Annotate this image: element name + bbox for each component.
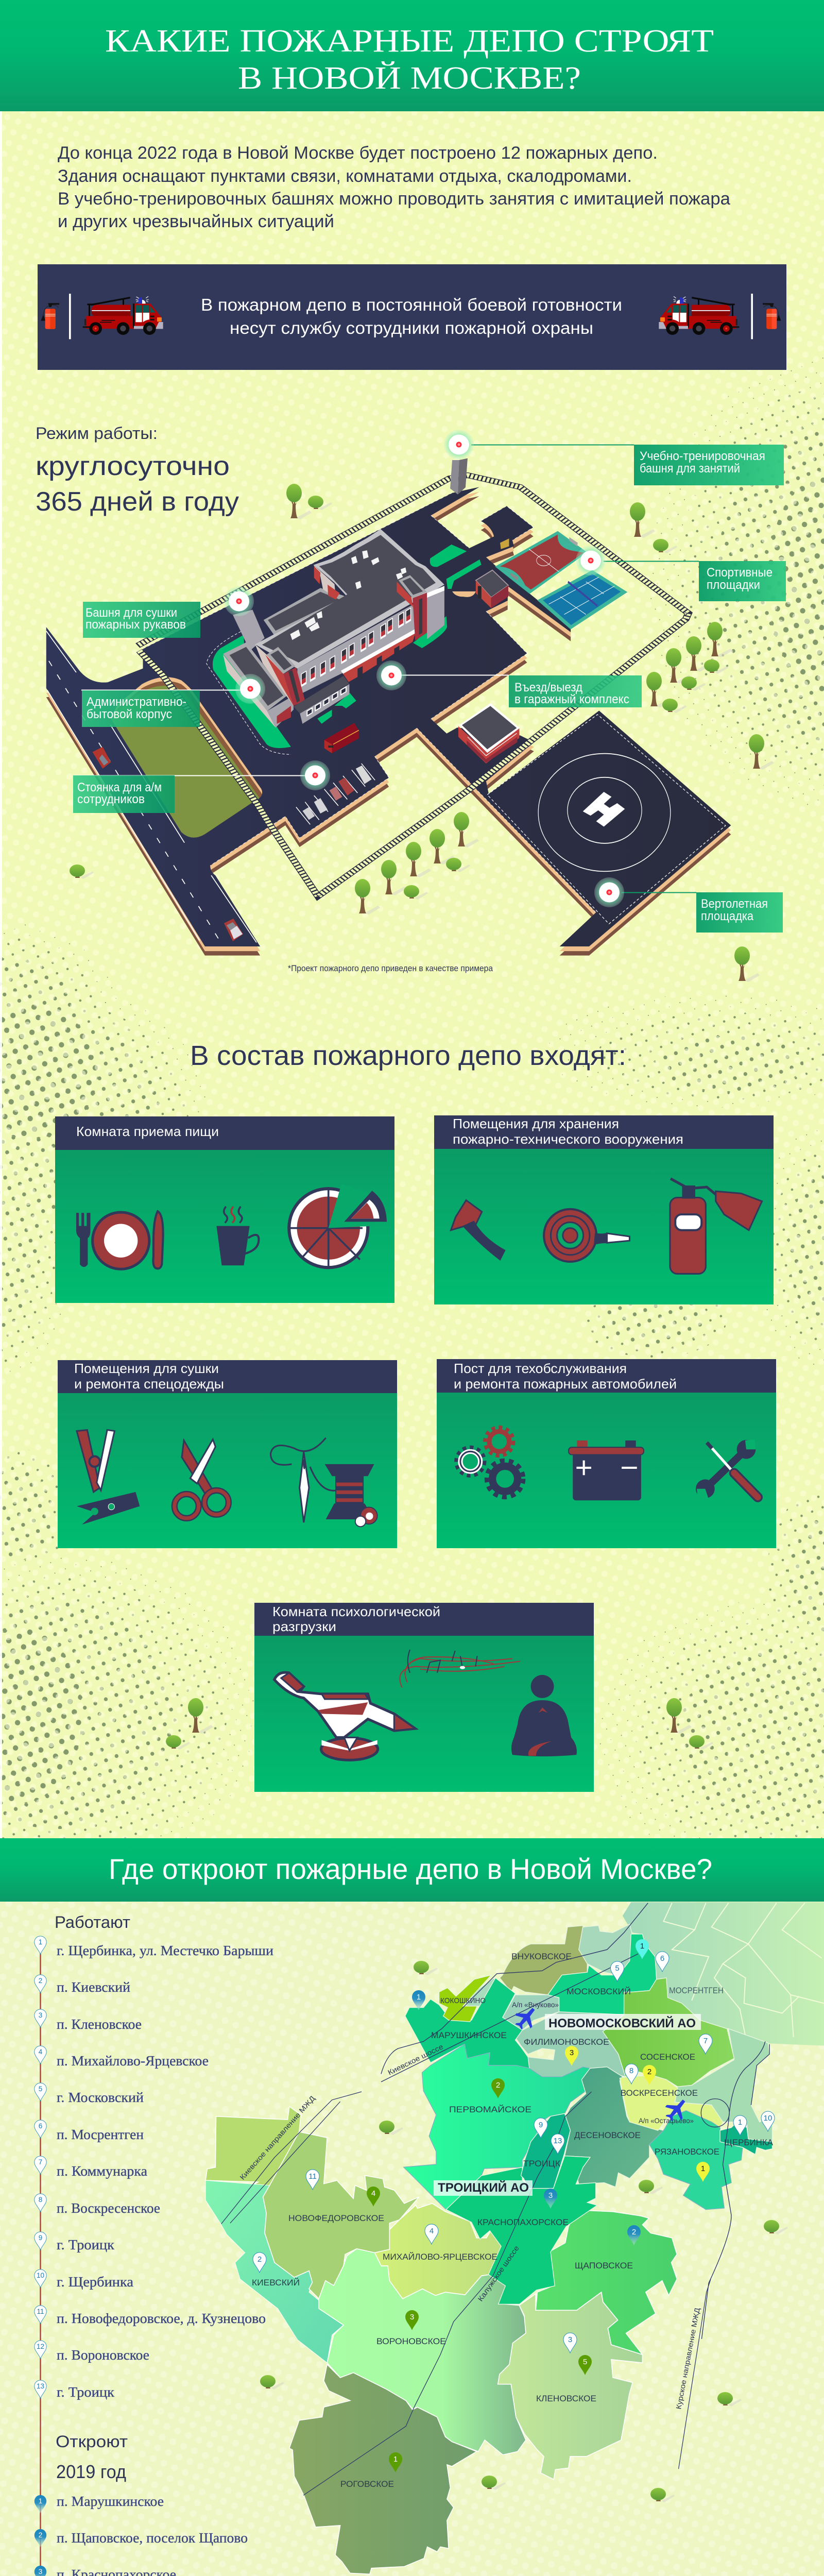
map pins: planned: 1 <box>640 1942 644 1951</box>
map pins: planned: 2 <box>647 2067 651 2076</box>
district names: СОСЕНСКОЕ <box>640 2052 695 2062</box>
callout: staff parking: сотрудников <box>77 792 145 806</box>
item 7: п. Коммунарка <box>57 2163 147 2179</box>
district names: ДЕСЕНОВСКОЕ <box>574 2130 641 2140</box>
panel: dining room: Комната приема пищи <box>76 1124 219 1139</box>
item 9 <box>35 2232 115 2252</box>
rear wing <box>264 588 347 635</box>
panel: equipment storage: пожарно-технического вооружения <box>453 1131 683 1147</box>
district names: КОКОШКИНО <box>440 1996 486 2005</box>
district names: МАРУШКИНСКОЕ <box>431 2030 507 2040</box>
helipad <box>487 715 726 924</box>
icon: right extinguisher, divider and truck <box>659 294 781 339</box>
schedule text <box>36 424 239 517</box>
callout: admin building: Административно- <box>87 695 186 709</box>
rooftop units <box>290 550 406 640</box>
panel: equipment storage <box>434 1115 774 1304</box>
map pins: operating: 8 <box>629 2066 633 2075</box>
map section background <box>0 1902 824 2576</box>
panel: psychological relief room: разгрузки <box>272 1619 336 1634</box>
item Щаповское: 2 <box>39 2531 42 2539</box>
fire truck <box>324 723 359 753</box>
map regions south and west <box>205 2107 677 2574</box>
item 8 <box>35 2194 160 2216</box>
item 11: п. Новофедоровское, д. Кузнецово <box>57 2311 266 2326</box>
item 4: 4 <box>39 2048 43 2056</box>
road labels <box>238 2042 701 2410</box>
callout: hose drying tower <box>83 586 254 638</box>
district names: МОСКОВСКИЙ <box>566 1987 631 1996</box>
trees around site <box>70 484 774 982</box>
callout: admin building: бытовой корпус <box>87 707 172 721</box>
road labels: Калужское шоссе <box>476 2244 521 2303</box>
district names: ЩЕРБИНКА <box>724 2138 774 2147</box>
map pins: operating: 7 <box>703 2037 708 2045</box>
okrug labels: ТРОИЦКИЙ АО <box>438 2180 529 2195</box>
old Moscow districts <box>623 1902 824 2046</box>
header band: map title: Где откроют пожарные депо в Новой Москве? <box>109 1853 712 1885</box>
district names: ВОСКРЕСЕНСКОЕ <box>621 2088 698 2098</box>
callout: helipad <box>594 877 783 933</box>
title line 2: В НОВОЙ МОСКВЕ? <box>238 61 581 96</box>
isometric site plan <box>46 430 786 982</box>
map of New Moscow <box>205 1902 824 2574</box>
district names: ТРОИЦК <box>523 2159 560 2168</box>
lawn <box>110 677 262 838</box>
banner: combat readiness <box>38 264 786 370</box>
item Марушкинское <box>35 2494 164 2513</box>
header band: map title <box>0 1838 824 1902</box>
item 2 <box>35 1975 130 1995</box>
panel: vehicle maintenance <box>437 1359 776 1548</box>
panel: vehicle maintenance: Пост для техобслуживания <box>454 1361 627 1376</box>
item 9: г. Троицк <box>57 2237 115 2252</box>
front wall <box>297 603 415 696</box>
map pins: planned: 1 <box>393 2455 398 2464</box>
district names: НОВОФЕДОРОВСКОЕ <box>288 2213 384 2223</box>
panel: uniform drying and repair <box>58 1360 397 1548</box>
icons: massage chair, music, meditating person <box>274 1650 577 1760</box>
map pins: operating: 6 <box>660 1954 664 1963</box>
callout: training tower: башня для занятий <box>640 462 740 476</box>
item 1: г. Щербинка, ул. Местечко Барыши <box>57 1943 273 1958</box>
panel: equipment storage: Помещения для хранения <box>453 1116 619 1131</box>
plan footnote: *Проект пожарного депо приведен в качестве примера <box>288 963 493 973</box>
schedule text: 365 дней в году <box>36 487 239 517</box>
callout: garage entrance: в гаражный комплекс <box>514 692 629 706</box>
parked cars <box>296 764 375 824</box>
district names <box>252 1952 774 2489</box>
map pins: operating: 9 <box>539 2121 543 2129</box>
section heading: rooms: В состав пожарного депо входят: <box>190 1040 626 1071</box>
fence <box>138 475 689 896</box>
item 10: 10 <box>37 2272 44 2279</box>
district names: КЛЕНОВСКОЕ <box>536 2394 596 2403</box>
main building block <box>92 529 444 824</box>
item 8: 8 <box>39 2196 42 2204</box>
bushes on map <box>260 1961 788 2502</box>
district names: ФИЛИМОНОВСКОЕ <box>524 2037 609 2047</box>
red shed <box>476 570 508 608</box>
airports: А/п «Внуково» <box>512 2001 559 2009</box>
doors band <box>341 629 415 674</box>
header band: main title <box>0 0 824 111</box>
map pins: planned <box>367 1939 710 2472</box>
icons: gears, battery, tools <box>456 1427 758 1500</box>
okrug labels: НОВОМОСКОВСКИЙ АО <box>548 2016 696 2030</box>
item 6 <box>35 2120 144 2142</box>
callout: sports grounds: Спортивные <box>707 566 772 580</box>
list heading: to open: Откроют <box>56 2432 128 2451</box>
item 7 <box>35 2156 147 2179</box>
site asphalt base with extruded edge <box>46 475 731 956</box>
map pins: planned: 2 <box>632 2228 636 2236</box>
airports <box>510 2001 694 2125</box>
item 4 <box>35 2046 209 2069</box>
icons: plate, cup, pizza <box>76 1184 387 1269</box>
district names: РОГОВСКОЕ <box>340 2479 394 2489</box>
district names: ПЕРВОМАЙСКОЕ <box>449 2105 531 2114</box>
callout: helipad: Вертолетная <box>701 897 768 911</box>
item 11: 11 <box>37 2308 44 2315</box>
banner text: несут службу сотрудники пожарной охраны <box>230 318 593 337</box>
callout: garage entrance <box>376 660 642 707</box>
panel: psychological relief room: Комната психологической <box>272 1604 440 1619</box>
item 1: 1 <box>39 1938 42 1946</box>
intro text block: Здания оснащают пунктами связи, комнатами отдыха, скалодромами. <box>58 166 632 186</box>
building east wall <box>427 586 444 639</box>
green strips <box>413 545 482 648</box>
okrug labels <box>434 2014 701 2196</box>
item 5: 5 <box>39 2085 42 2093</box>
district names: КРАСНОПАХОРСКОЕ <box>477 2217 569 2227</box>
callout: helipad: площадка <box>701 909 754 923</box>
panel: uniform drying and repair: и ремонта спецодежды <box>74 1376 224 1392</box>
icon: left extinguisher, divider and truck <box>41 294 163 339</box>
map pins: planned: 2 <box>496 2081 500 2090</box>
callout: sports grounds <box>576 546 786 601</box>
item 8: п. Воскресенское <box>57 2200 160 2216</box>
map pins: planned: 5 <box>583 2358 587 2366</box>
map pins: planned: 4 <box>371 2189 375 2198</box>
intro text block <box>58 143 730 231</box>
icons: axe, hose, extinguisher <box>451 1179 762 1274</box>
intro text block: и других чрезвычайных ситуаций <box>58 212 334 231</box>
item 4: п. Михайлово-Ярцевское <box>57 2053 209 2069</box>
map pins: operating: 10 <box>764 2114 772 2123</box>
road labels: Курское направление МЖД <box>674 2307 701 2410</box>
district names: ВНУКОВСКОЕ <box>511 1952 572 1961</box>
road labels: Киевское шоссе <box>386 2042 444 2077</box>
low annex <box>294 676 349 714</box>
district names: МИХАЙЛОВО-ЯРЦЕВСКОЕ <box>383 2252 497 2262</box>
item Краснопахорское: 3 <box>39 2568 42 2575</box>
callout: hose drying tower: Башня для сушки <box>85 606 177 620</box>
airports: А/п «Остафьево» <box>639 2116 694 2125</box>
map pins: planned: 3 <box>410 2313 414 2321</box>
item 9: 9 <box>39 2234 42 2242</box>
stair tower right <box>397 582 413 607</box>
item 12: 12 <box>37 2343 44 2350</box>
item 6: п. Мосрентген <box>57 2127 144 2142</box>
callout: staff parking <box>73 760 330 813</box>
item 2: 2 <box>39 1977 42 1985</box>
trees near relief room <box>166 1698 713 1750</box>
district names: МОСРЕНТГЕН <box>669 1986 724 1995</box>
map pins: planned: 1 <box>701 2164 705 2173</box>
admin wing <box>223 642 287 711</box>
map pins: planned: 3 <box>570 2048 574 2057</box>
road markings <box>46 631 256 942</box>
title line 1: КАКИЕ ПОЖАРНЫЕ ДЕПО СТРОЯТ <box>105 24 714 59</box>
item 3: 3 <box>39 2011 42 2019</box>
item 10 <box>35 2269 133 2290</box>
item 5: г. Московский <box>57 2090 144 2105</box>
map pins: operating: 11 <box>308 2172 317 2181</box>
list: operating depots <box>35 1936 273 2400</box>
district names: ЩАПОВСКОЕ <box>575 2261 633 2270</box>
item 13: г. Троицк <box>57 2384 115 2400</box>
item 7: 7 <box>39 2158 42 2166</box>
item 2: п. Киевский <box>57 1979 130 1995</box>
item 6: 6 <box>39 2122 42 2130</box>
callout: admin building <box>81 674 265 727</box>
item 5 <box>35 2083 144 2105</box>
callout: training tower <box>444 430 784 485</box>
windows <box>301 607 411 687</box>
main roof <box>255 529 444 669</box>
garage building <box>458 703 520 764</box>
map pins: operating: 4 <box>430 2227 434 2235</box>
green lawn around building <box>213 635 291 748</box>
map pins: operating: 2 <box>258 2255 262 2264</box>
item 12 <box>35 2341 149 2363</box>
road labels: Киевское направление МЖД <box>238 2094 317 2181</box>
item 11 <box>35 2306 266 2326</box>
callout: garage entrance: Въезд/выезд <box>514 681 582 694</box>
item 3: п. Кленовское <box>57 2016 142 2032</box>
banner text <box>201 295 622 337</box>
car on lower road <box>224 919 243 941</box>
item 3 <box>35 2009 142 2032</box>
panel: dining room <box>55 1116 394 1303</box>
district names: КИЕВСКИЙ <box>252 2278 300 2287</box>
map regions north and centre <box>404 1902 824 2304</box>
schedule text: круглосуточно <box>36 451 230 481</box>
district names: РЯЗАНОВСКОЕ <box>655 2147 719 2157</box>
map pins: planned: 3 <box>548 2191 553 2200</box>
stair tower left <box>255 645 294 706</box>
list heading: operating: Работают <box>55 1913 130 1931</box>
callout: sports grounds: площадки <box>707 578 760 592</box>
callout: training tower: Учебно-тренировочная <box>640 449 765 463</box>
icons: clothespins, scissors, needle and spool <box>77 1430 377 1527</box>
map pins: operating: 3 <box>568 2335 572 2344</box>
panel: psychological relief room <box>254 1603 594 1792</box>
football court <box>495 531 587 594</box>
banner text: В пожарном депо в постоянной боевой готовности <box>201 295 622 314</box>
panel: uniform drying and repair: Помещения для сушки <box>74 1361 219 1376</box>
map pins: operating: 13 <box>554 2137 562 2145</box>
panel: vehicle maintenance: и ремонта пожарных автомобилей <box>454 1376 677 1392</box>
intro text block: До конца 2022 года в Новой Москве будет построено 12 пожарных депо. <box>58 143 658 163</box>
timeline left <box>40 1942 41 2576</box>
map pins: operating: 5 <box>615 1964 620 1973</box>
callout: hose drying tower: пожарных рукавов <box>85 618 186 632</box>
item 13: 13 <box>37 2382 44 2390</box>
item 1 <box>35 1936 273 1958</box>
drying tower <box>233 610 265 651</box>
item 13 <box>35 2380 115 2400</box>
list: 2019 <box>35 2461 248 2576</box>
north yard: courts, shed, tower, helipad, garage <box>413 459 726 924</box>
item Щаповское: п. Щаповское, поселок Щапово <box>57 2530 248 2546</box>
item Марушкинское: 1 <box>39 2497 42 2505</box>
map pins: operating: 1 <box>738 2118 742 2127</box>
map pins: operating <box>253 1952 775 2353</box>
tennis court <box>537 570 627 630</box>
schedule text: Режим работы: <box>36 424 158 443</box>
icon: training tower <box>450 459 468 495</box>
item 12: п. Вороновское <box>57 2347 149 2363</box>
yellow vehicle <box>500 538 509 549</box>
map pins: planned: 1 <box>417 1993 421 2002</box>
cars on road <box>92 747 111 769</box>
item Марушкинское: п. Марушкинское <box>57 2494 164 2509</box>
intro text block: В учебно-тренировочных башнях можно проводить занятия с имитацией пожара <box>58 189 730 209</box>
item 10: г. Щербинка <box>57 2274 133 2290</box>
roads and railways <box>381 1903 769 2339</box>
year 2019: 2019 год <box>56 2461 126 2482</box>
district names: ВОРОНОВСКОЕ <box>376 2336 446 2346</box>
callout: staff parking: Стоянка для а/м <box>77 781 162 794</box>
